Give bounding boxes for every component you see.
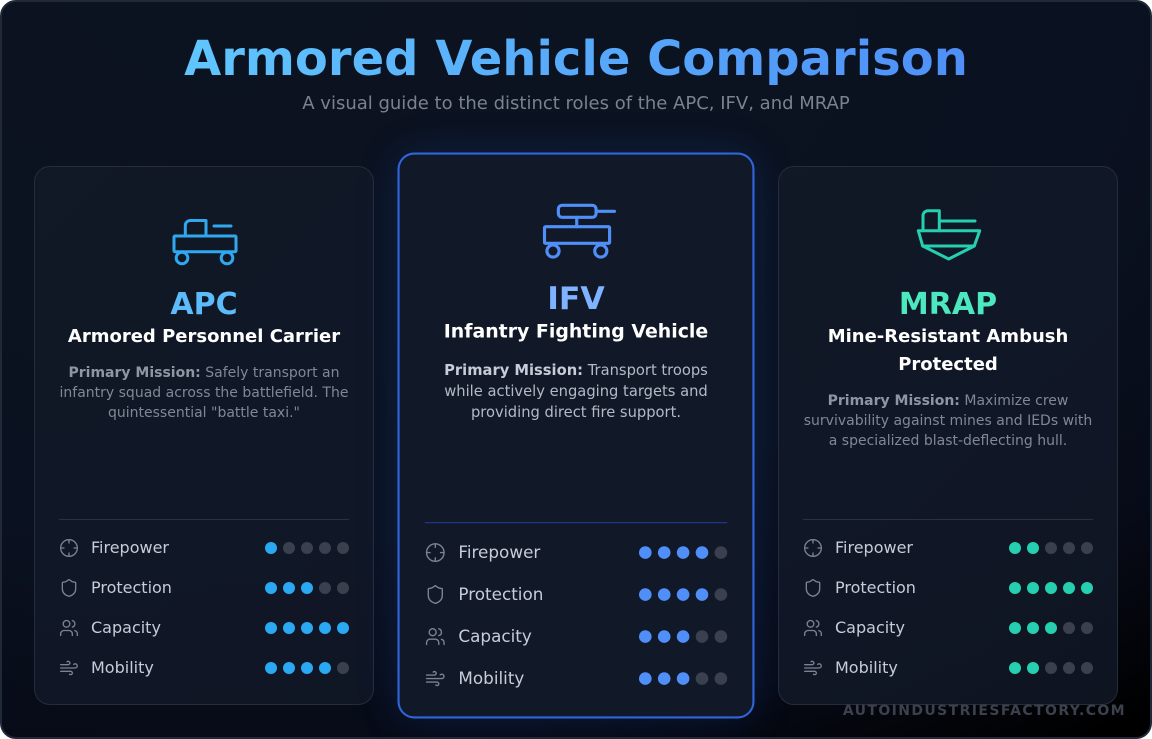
stat: mobility xyxy=(804,658,1093,677)
panel: APC xyxy=(34,166,374,705)
panel: MRAP xyxy=(778,166,1118,705)
stat: capacity: Capacity xyxy=(91,618,161,637)
stat: firepower xyxy=(426,542,728,562)
IFV name: IFV xyxy=(547,281,605,317)
stat: protection: Protection xyxy=(458,584,543,604)
icon: MRAP vehicle xyxy=(916,209,982,260)
stat: mobility: Mobility xyxy=(91,658,154,677)
stat: mobility xyxy=(426,668,728,688)
stat: protection xyxy=(806,578,1093,597)
stat: protection: Protection xyxy=(835,578,916,597)
IFV mission: Primary Mission: Transport troops while actively engaging targets and providing direct fire support. xyxy=(444,363,708,421)
panel: IFV xyxy=(398,153,754,718)
IFV full name: Infantry Fighting Vehicle xyxy=(444,321,708,343)
stat: firepower: Firepower xyxy=(835,538,913,557)
title: Armored Vehicle Comparison xyxy=(184,31,968,87)
APC name: APC xyxy=(170,287,238,322)
MRAP mission: Primary Mission: Maximize crew survivability against mines and IEDs with a specialized blast-deflecting hull. xyxy=(804,393,1092,449)
stat: mobility xyxy=(60,658,349,677)
stat: protection: Protection xyxy=(91,578,172,597)
subtitle: A visual guide to the distinct roles of the APC, IFV, and MRAP xyxy=(302,93,850,114)
stat: protection xyxy=(428,584,728,604)
stat: mobility: Mobility xyxy=(835,658,898,677)
icon: APC vehicle xyxy=(172,219,238,266)
stat: firepower xyxy=(804,538,1093,557)
stat: firepower: Firepower xyxy=(458,542,540,562)
stat: capacity xyxy=(804,618,1093,637)
MRAP name: MRAP xyxy=(899,287,997,322)
APC full name: Armored Personnel Carrier xyxy=(68,326,340,347)
stat: firepower: Firepower xyxy=(91,538,169,557)
APC mission: Primary Mission: Safely transport an infantry squad across the battlefield. The quintessential "battle taxi." xyxy=(60,365,348,421)
stat: capacity xyxy=(60,618,349,637)
stat: mobility: Mobility xyxy=(458,668,524,688)
stat: protection xyxy=(62,578,349,597)
stat: firepower xyxy=(60,538,349,557)
stat: capacity xyxy=(426,626,728,646)
stat: capacity: Capacity xyxy=(458,626,532,646)
icon: IFV vehicle xyxy=(542,204,616,259)
stat: capacity: Capacity xyxy=(835,618,905,637)
MRAP full name: Mine-Resistant Ambush Protected xyxy=(828,326,1068,375)
watermark: AUTOINDUSTRIESFACTORY.COM xyxy=(843,703,1126,719)
